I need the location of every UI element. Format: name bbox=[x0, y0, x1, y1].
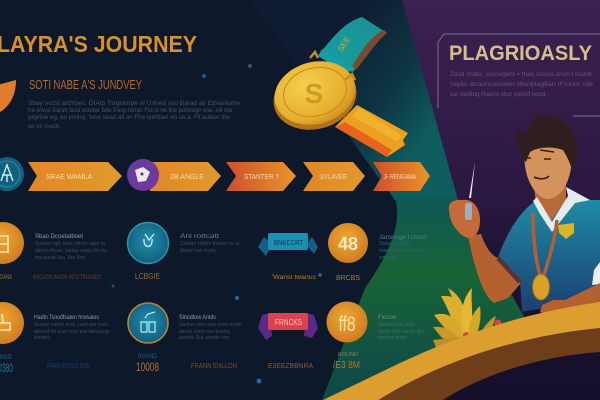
green wedge bbox=[322, 198, 526, 400]
banner: teal bbox=[258, 233, 318, 256]
intro text block: Sbay wozd ardYoes. OIAtp Torgrampe of Urined suo Barad atl Edvanieme bbox=[28, 101, 241, 107]
medal: S bbox=[305, 78, 323, 109]
row 2 bbox=[0, 302, 424, 375]
text block 5: tardns Sat aonds roo bbox=[179, 335, 229, 341]
text block 2: Sartan nighs frosen ts to bbox=[180, 241, 240, 247]
banner: red: FRNCKS bbox=[275, 318, 302, 327]
shirt bbox=[498, 200, 600, 312]
icon: orange glyph circle: ff8 bbox=[338, 313, 356, 336]
panel text block: Zaod rtrialx, vecoogent = than scions onon t feanlk bbox=[450, 71, 593, 78]
label: BRCBS bbox=[336, 275, 360, 282]
label: ROUND bbox=[138, 354, 158, 360]
text block 1: dacrto thsoe. sartan sings fon be bbox=[35, 248, 107, 254]
icon: orange glyph circle bbox=[326, 302, 368, 342]
text block 5: Sanlan rton nsat yons frvom bbox=[179, 322, 242, 328]
arrow 2 bbox=[150, 162, 221, 191]
medal bbox=[266, 17, 408, 157]
text block 6 bbox=[378, 315, 424, 341]
spark bbox=[469, 162, 475, 198]
subheading: SOTI NABE A'S JUNDVEY bbox=[29, 77, 142, 92]
text block 4: donmt ta sian tosl tse tanpang bbox=[34, 329, 109, 335]
text block 2 bbox=[180, 234, 240, 254]
sleeve band bbox=[498, 258, 520, 282]
text block 2: draw ma toyts bbox=[180, 248, 217, 254]
text block 4: tordos bbox=[34, 335, 51, 341]
collar bbox=[533, 187, 590, 232]
arrow 5 bbox=[373, 162, 430, 191]
label: E3EEZBBNRA bbox=[268, 363, 313, 370]
panel text block: heplo atracnoasivien dtenplagflan rFtonot cite bbox=[450, 81, 593, 88]
text block 6: tordos etan bbox=[378, 335, 406, 341]
plant bbox=[433, 288, 502, 350]
icon: teal circle with gold rim bbox=[128, 303, 168, 343]
arrow 2: 2B ANGLE bbox=[170, 172, 204, 181]
panel text block: cut owdtng Hauno stun pstold oond. bbox=[450, 91, 547, 98]
intro text block: so ov rsock. bbox=[28, 124, 61, 130]
text block 6: dacrto tsen vas for tlen bbox=[378, 329, 424, 335]
intro text block bbox=[28, 101, 241, 130]
text block 3: nsand wnten bhnd stal bbox=[379, 248, 425, 254]
text block 5: Slnodtow Antds bbox=[179, 315, 216, 321]
label: ROUD bbox=[0, 355, 12, 361]
icon: shield bbox=[0, 80, 16, 112]
medal on chest bbox=[532, 274, 550, 300]
hair bbox=[516, 111, 577, 170]
label: FRAN EDVUS ENS bbox=[47, 363, 90, 370]
label: FRANN ENLLON bbox=[191, 363, 237, 370]
text block 6: Flosoe bbox=[378, 315, 397, 321]
text block 1: ma guste tlun. fao Bxs bbox=[35, 255, 85, 261]
text block 2: Anl rottcatt bbox=[180, 234, 219, 240]
text block 1 bbox=[35, 234, 107, 261]
icon: orange circle bbox=[0, 222, 24, 264]
text block 5: dacrto nrsot rtoe boeths bbox=[179, 329, 230, 335]
label: LCBGIE bbox=[135, 272, 160, 281]
label: ROUND bbox=[338, 352, 358, 358]
icon: orange 48 circle bbox=[328, 223, 368, 263]
medal strap bbox=[533, 213, 557, 275]
character bbox=[449, 111, 600, 320]
right edge sleeve trim bbox=[592, 262, 600, 285]
teal wedge behind medal bbox=[250, 0, 458, 200]
icon: teal circle bbox=[127, 222, 169, 264]
arrow 4: SYLAVEE bbox=[320, 172, 347, 181]
neck bbox=[534, 180, 566, 222]
arrow 3: STANTER ? bbox=[244, 172, 279, 181]
lower arm bbox=[540, 283, 600, 320]
curved ribbon bbox=[323, 302, 600, 400]
arrow 1 bbox=[28, 162, 122, 191]
arrow 4 bbox=[303, 162, 365, 191]
row 1 bbox=[0, 222, 426, 282]
chest badge bbox=[558, 223, 574, 239]
text block 4: Hadtn Tsoodfsaten hrwsates bbox=[34, 315, 99, 321]
icon: teal start circle bbox=[0, 157, 24, 191]
label: DANA bbox=[0, 274, 12, 281]
icon: orange 48 circle: 48 bbox=[338, 234, 358, 254]
medal ribbon top bbox=[320, 17, 387, 72]
banner: red bbox=[258, 313, 318, 340]
medal coin bbox=[266, 55, 364, 139]
text block 4: Sontan natlan bran, nant sse lasts bbox=[34, 322, 108, 328]
title: LAYRA'S JOURNEY bbox=[0, 31, 197, 57]
label: /E3 8M bbox=[333, 360, 360, 371]
ribbon gold band bbox=[323, 302, 600, 400]
medal clasps bbox=[310, 52, 355, 80]
face bbox=[525, 137, 572, 199]
text block 3: Jansnsge I chool bbox=[379, 235, 426, 241]
arrow 5: 3- RENGAMA bbox=[384, 172, 416, 181]
icon: orange circle bbox=[0, 302, 24, 344]
intro text block: ha wova Sarah laxd wanter bde Parg rome! Fld is ne the pohvage wia, sill nia bbox=[28, 108, 233, 114]
text block 3 bbox=[379, 235, 426, 261]
raised arm bbox=[468, 234, 522, 303]
icon: purple circle bbox=[127, 159, 159, 191]
label: 'Wanst twanuc bbox=[272, 274, 317, 281]
text block 1: Sbao Dcoetatboet bbox=[35, 234, 83, 240]
medal: SEE bbox=[336, 35, 352, 53]
text block 3: vorse bbox=[379, 255, 397, 261]
text block 3: Sartan rumpher bbox=[379, 241, 411, 247]
sparkle dots bbox=[112, 64, 322, 384]
eyes and smile bbox=[525, 149, 554, 179]
intro text block: exprine eg, eo joving, 'tvue sead all on Fhe sumtae! en se a. Fll auteer the bbox=[28, 115, 231, 121]
banner: teal: BNKCCRT bbox=[274, 240, 304, 247]
panel heading: PLAGRIOASLY bbox=[449, 42, 592, 65]
right panel heading frame bbox=[438, 34, 600, 116]
arrow 1: SRAE WAMLA bbox=[46, 172, 92, 181]
panel text block bbox=[450, 71, 593, 98]
arrow 3 bbox=[226, 162, 296, 191]
raised hand bbox=[449, 200, 480, 238]
step arrows bbox=[0, 157, 430, 191]
label: 10008 bbox=[136, 360, 159, 374]
text block 4 bbox=[34, 315, 109, 341]
purple panel background bbox=[398, 0, 600, 400]
holding device bbox=[465, 203, 472, 220]
medal ribbon tails bbox=[335, 105, 408, 157]
label: RSOUSN INVOB INTS TIRAINDS bbox=[33, 274, 101, 281]
ribbon shadow band bbox=[370, 328, 600, 400]
text block 6: Santan sen dean bbox=[378, 322, 415, 328]
text block 5 bbox=[179, 315, 242, 341]
text block 1: Sontan nigh tram ndrom vaps to bbox=[35, 241, 105, 247]
